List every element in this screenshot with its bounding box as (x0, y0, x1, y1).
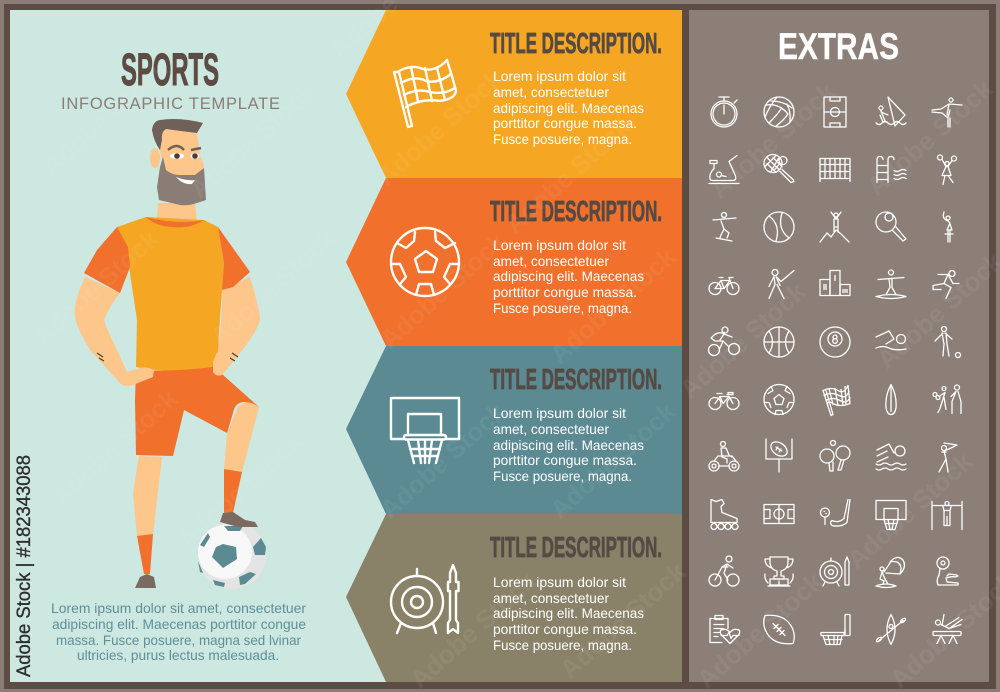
text block: left description: massa. Fusce posuere, magna sed lvinar (56, 632, 301, 648)
watermark: stock text: Adobe Stock (704, 76, 842, 204)
panel: arrow 4: amet, consectetuer (493, 590, 609, 606)
icon: tennis ball (764, 212, 794, 242)
icon: table tennis racket and ball (876, 212, 906, 241)
icon: racing cyclist (709, 556, 739, 586)
panel: arrow 3: Fusce posuere, magna. (493, 468, 632, 484)
icon: cheerleader (938, 155, 956, 184)
panel: arrow 4: Fusce posuere, magna. (493, 637, 632, 653)
panel: arrow 1: Fusce posuere, magna. (493, 131, 632, 147)
panel: arrow 2: Fusce posuere, magna. (493, 300, 632, 316)
text block: left description (51, 600, 306, 663)
watermark: stock text: Adobe Stock (374, 226, 512, 354)
icon: medical clipboard with heart (710, 616, 740, 644)
watermark: stock text: Adobe Stock (544, 396, 682, 524)
panel: arrow 1: Lorem ipsum dolor sit (493, 68, 626, 84)
icon: skateboarder (713, 212, 736, 241)
panel: arrow 4: adipiscing elit. Maecenas (493, 605, 644, 621)
panel: arrow 3: porttitor congue massa. (493, 452, 637, 468)
icon: windsurfing (876, 97, 906, 126)
panel: arrow 3: Lorem ipsum dolor sit (493, 405, 626, 421)
icon: swimmer (876, 331, 906, 350)
panel: arrow 3: adipiscing elit. Maecenas (493, 437, 644, 453)
panel: mint background (10, 10, 682, 682)
watermark: stock text: Adobe Stock (861, 73, 999, 201)
panel: arrow 3: amet, consectetuer (493, 421, 609, 437)
panel: arrow 2: porttitor congue massa. (493, 284, 637, 300)
watermark: stock text: Adobe Stock (691, 566, 829, 692)
subtitle: INFOGRAPHIC TEMPLATE (61, 95, 280, 113)
icon: volleyball (764, 97, 794, 127)
icon: weightlifting arm (937, 557, 958, 585)
icon grid: extras (708, 97, 962, 644)
panel: arrow 1: TITLE DESCRIPTION. (490, 28, 662, 60)
illustration: football player (74, 119, 266, 589)
icon: kayak (876, 614, 906, 644)
icon: goal net (820, 158, 850, 182)
icon: podium (820, 270, 850, 296)
panel: arrow 2: Lorem ipsum dolor sit (493, 237, 626, 253)
illustration: soccer ball (198, 521, 266, 589)
icon: cyclist (708, 327, 740, 356)
icon: mountain climber (820, 212, 849, 242)
icon: motorcycle rider (709, 442, 739, 471)
icon: city bicycle (709, 392, 739, 410)
icon: exercise bike (709, 156, 739, 184)
icon: billiard eight ball (820, 327, 850, 357)
icon: fencer (769, 270, 794, 298)
icon: golf club and ball (820, 500, 850, 526)
icon: ballet dancer (932, 98, 962, 127)
icon: checkered flag small (823, 386, 850, 416)
text block: left description: ultricies, purus lectus malesuada. (77, 647, 279, 663)
icon: swimmer in waves (876, 444, 906, 470)
text block: left description: Lorem ipsum dolor sit amet, consectetuer (51, 600, 306, 616)
watermark: stock text: Adobe Stock (371, 63, 509, 191)
icon: kitesurfer (876, 557, 904, 588)
watermark: stock text: Adobe Stock (36, 53, 174, 181)
icon: bicycle (709, 278, 739, 294)
icon: golfer (939, 443, 957, 472)
watermark: stock text: Adobe Stock (27, 223, 165, 351)
panel: arrow 2: amet, consectetuer (493, 253, 609, 269)
icon: soccer ball small (764, 384, 794, 414)
watermark: stock text: Adobe Stock (204, 223, 342, 351)
icon: paddle surfer (876, 270, 906, 298)
icon: tennis racket (764, 154, 794, 182)
panel: arrow 2 (346, 178, 682, 346)
panel: arrow 1: porttitor congue massa. (493, 115, 637, 131)
icon: vault gymnast (933, 614, 962, 644)
watermark: stock text: Adobe Stock (404, 566, 542, 692)
watermark: stock text: Adobe Stock (544, 241, 682, 369)
icon: pool ladder (877, 156, 906, 182)
icon: trophy (765, 557, 793, 586)
panel: arrow 4: TITLE DESCRIPTION. (490, 532, 662, 564)
text block: left description: adipiscing elit. Maecenas porttitor congue (52, 616, 306, 632)
panel: arrow 3: TITLE DESCRIPTION. (490, 364, 662, 396)
panel: arrow 2: TITLE DESCRIPTION. (490, 196, 662, 228)
icon: archery target and arrow (391, 565, 458, 633)
panel: arrow 4: porttitor congue massa. (493, 621, 637, 637)
icon: american football (764, 615, 794, 644)
icon: soccer ball (391, 228, 459, 296)
watermark: stock text: Adobe Stock (674, 276, 812, 404)
panel: arrow 1: amet, consectetuer (493, 84, 609, 100)
icon: football field (764, 504, 794, 524)
panel: arrow 1: adipiscing elit. Maecenas (493, 100, 644, 116)
icon: football pitch (824, 97, 846, 127)
panel: arrow 4: Lorem ipsum dolor sit (493, 574, 626, 590)
watermark: stock text: Adobe Stock (184, 76, 322, 204)
watermark: stock text: Adobe Stock (374, 396, 512, 524)
panel: arrow 1 (346, 10, 682, 178)
icon: archery target small (820, 557, 849, 586)
heading: extras: EXTRAS (778, 26, 899, 67)
icon: basketball backboard side view (821, 614, 850, 644)
icon: inline skate (711, 500, 738, 530)
panel: arrow 4 (346, 514, 682, 682)
watermark: adobe stock id: Adobe Stock | #182343088 (14, 455, 35, 677)
title: SPORTS (121, 44, 219, 95)
icon: american football goal (766, 439, 792, 472)
icon: stopwatch (711, 97, 737, 127)
panel: extras background (689, 10, 989, 682)
icon: rhythmic gymnast (943, 212, 953, 242)
watermark: stock text: Adobe Stock (554, 556, 692, 684)
icon: basketball hoop (391, 398, 459, 463)
icon: surfboard (886, 384, 896, 414)
watermark: stock text: Adobe Stock (171, 426, 309, 554)
icon: martial artists (933, 385, 961, 414)
panel: arrow 3 (346, 346, 682, 514)
panel: arrow 2: adipiscing elit. Maecenas (493, 268, 644, 284)
watermark: stock text: Adobe Stock (46, 383, 184, 511)
icon: checkered flag (394, 60, 456, 127)
watermark: stock text: Adobe Stock (499, 111, 637, 239)
icon: pull-up bar (932, 502, 962, 530)
icon: basketball hoop small (876, 500, 906, 530)
icon: runner jumping (933, 270, 959, 298)
icon: soccer player (935, 326, 960, 358)
icon: ping pong paddles (820, 440, 850, 471)
watermark: stock text: Adobe Stock (841, 446, 979, 574)
icon: basketball (764, 327, 794, 357)
